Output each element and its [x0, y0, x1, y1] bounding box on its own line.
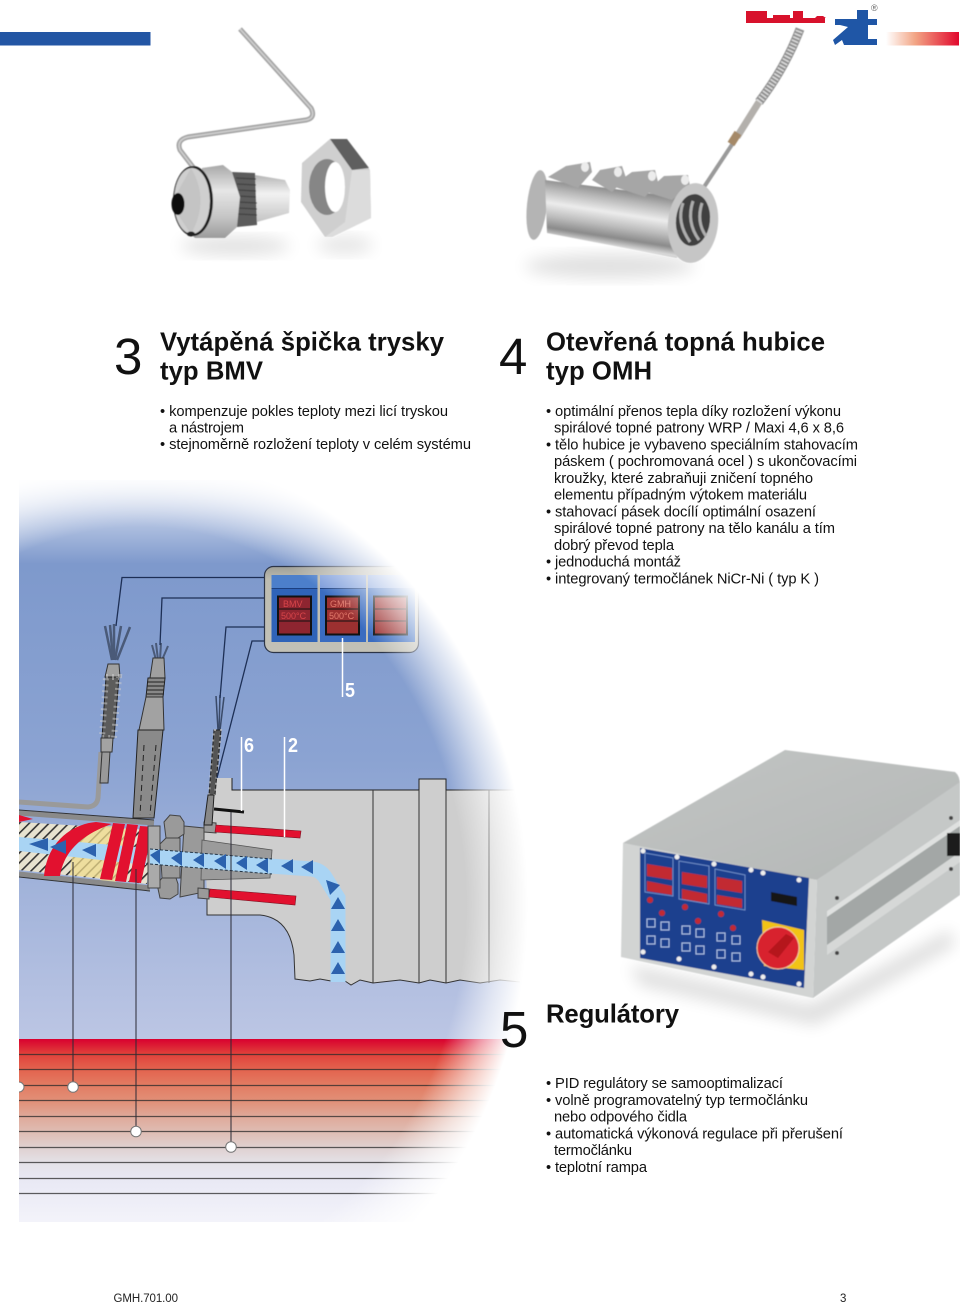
cable 2 — [133, 643, 168, 818]
control module 2: 500°C — [329, 611, 355, 621]
section 4 heading — [499, 328, 825, 386]
title section 4 — [546, 328, 825, 386]
section 5 bullet list: • volně programovatelný typ termočlánku — [546, 1093, 808, 1109]
section number 5: 5 — [500, 1001, 528, 1058]
controller front frame — [621, 843, 817, 998]
section number 4: 4 — [499, 328, 527, 385]
cross-section diagram — [14, 480, 539, 1222]
controller side — [813, 782, 960, 998]
section 4 bullet list: dobrý převod tepla — [554, 538, 675, 554]
controller lid — [623, 750, 960, 880]
melt channel in mould — [270, 859, 345, 982]
hex nut and housing — [148, 815, 216, 899]
photo: open heater band with coil — [523, 29, 800, 278]
control wires — [116, 578, 265, 778]
logo: blue emblem — [833, 10, 877, 45]
melt arrows in nozzle tube — [29, 838, 96, 857]
section 4 bullet list: spirálové topné patrony na tělo kanálu a tím — [554, 521, 835, 537]
logo: red wordmark cropped — [746, 11, 826, 23]
callout 5: 5 — [345, 680, 355, 702]
title section 3: Vytápěná špička trysky — [160, 328, 445, 356]
section 4 bullet list: páskem ( pochromovaná ocel ) s ukončovacími — [554, 454, 857, 470]
section 4 bullet list: elementu případným výtokem materiálu — [554, 488, 807, 504]
red gradient header bar — [886, 32, 959, 46]
callout 6 — [242, 735, 254, 811]
controller screws — [640, 848, 802, 986]
control module 1 — [272, 575, 318, 642]
control module 3 — [368, 575, 415, 642]
section 5 heading — [500, 1000, 680, 1058]
heater coil — [19, 815, 153, 883]
section 5 bullet list: nebo odpového čidla — [554, 1110, 688, 1126]
title section 5: Regulátory — [546, 1000, 680, 1028]
white fade overlay — [19, 480, 539, 1222]
section 3 bullet list: a nástrojem — [169, 420, 244, 436]
mould block — [204, 778, 539, 985]
photo: controller unit — [621, 750, 960, 1025]
title section 4: typ OMH — [546, 358, 652, 386]
callout 5 — [342, 638, 355, 702]
cable 3 — [204, 695, 224, 825]
diagram background — [19, 480, 539, 1040]
section 4 bullet list: • stahovací pásek docílí optimální osazení — [546, 504, 817, 520]
control module 1: BMV — [283, 599, 303, 609]
section 4 bullet list: • integrovaný termočlánek NiCr-Ni ( typ K ) — [546, 572, 819, 588]
control module 2: GMH — [330, 599, 351, 609]
heating rods — [209, 825, 301, 905]
cable 1 — [100, 624, 130, 783]
title section 3: typ BMV — [160, 358, 263, 386]
section 5 bullet list: termočlánku — [554, 1143, 632, 1159]
section 5 bullet list: • teplotní rampa — [546, 1160, 648, 1176]
section 4 bullet list: • optimální přenos tepla díky rozložení výkonu — [546, 404, 841, 420]
section 3 bullet list — [160, 404, 471, 453]
section 5 bullet list: • PID regulátory se samooptimalizací — [546, 1076, 784, 1092]
control module 1: 500°C — [281, 611, 307, 621]
nozzle melt channel — [150, 849, 272, 874]
section 4 bullet list: spirálové topné patrony WRP / Maxi 4,6 x 8,6 — [554, 421, 844, 437]
section 5 bullet list — [546, 1076, 844, 1176]
section 4 bullet list — [546, 404, 858, 588]
main switch — [757, 920, 804, 970]
title section 4: Otevřená topná hubice — [546, 328, 825, 356]
callout 2: 2 — [288, 735, 298, 757]
logo: registered mark: ® — [871, 3, 878, 13]
control unit panel — [264, 566, 418, 652]
controller front panel — [640, 848, 809, 988]
measuring lines and points — [14, 812, 236, 1152]
control module 2 — [320, 575, 366, 642]
callout 2 — [284, 735, 298, 837]
title section 3 — [160, 328, 445, 386]
section 5 bullet list: • automatická výkonová regulace při přerušení — [546, 1126, 844, 1142]
section number 3: 3 — [114, 328, 142, 385]
section 3 bullet list: • kompenzuje pokles teploty mezi licí tryskou — [160, 404, 448, 420]
temperature grid lines — [19, 1054, 539, 1194]
callout 6: 6 — [244, 735, 254, 757]
section 4 bullet list: kroužky, které zabraňuji zničení topného — [554, 471, 813, 487]
controller modules — [645, 853, 797, 961]
logo — [746, 3, 878, 45]
section 3 bullet list: • stejnoměrně rozložení teploty v celém systému — [160, 437, 471, 453]
section 4 bullet list: • jednoduchá montáž — [546, 555, 681, 571]
nozzle tube and hatched body — [19, 752, 154, 891]
section 4 bullet list: • tělo hubice je vybaveno speciálním stahovacím — [546, 438, 858, 454]
photo: heated nozzle tip with nut — [172, 29, 373, 255]
nozzle cone — [201, 840, 272, 880]
blue header bar — [0, 32, 150, 46]
section 3 heading — [114, 328, 445, 386]
temperature band — [19, 1039, 539, 1222]
thermocouple tip — [214, 809, 244, 812]
